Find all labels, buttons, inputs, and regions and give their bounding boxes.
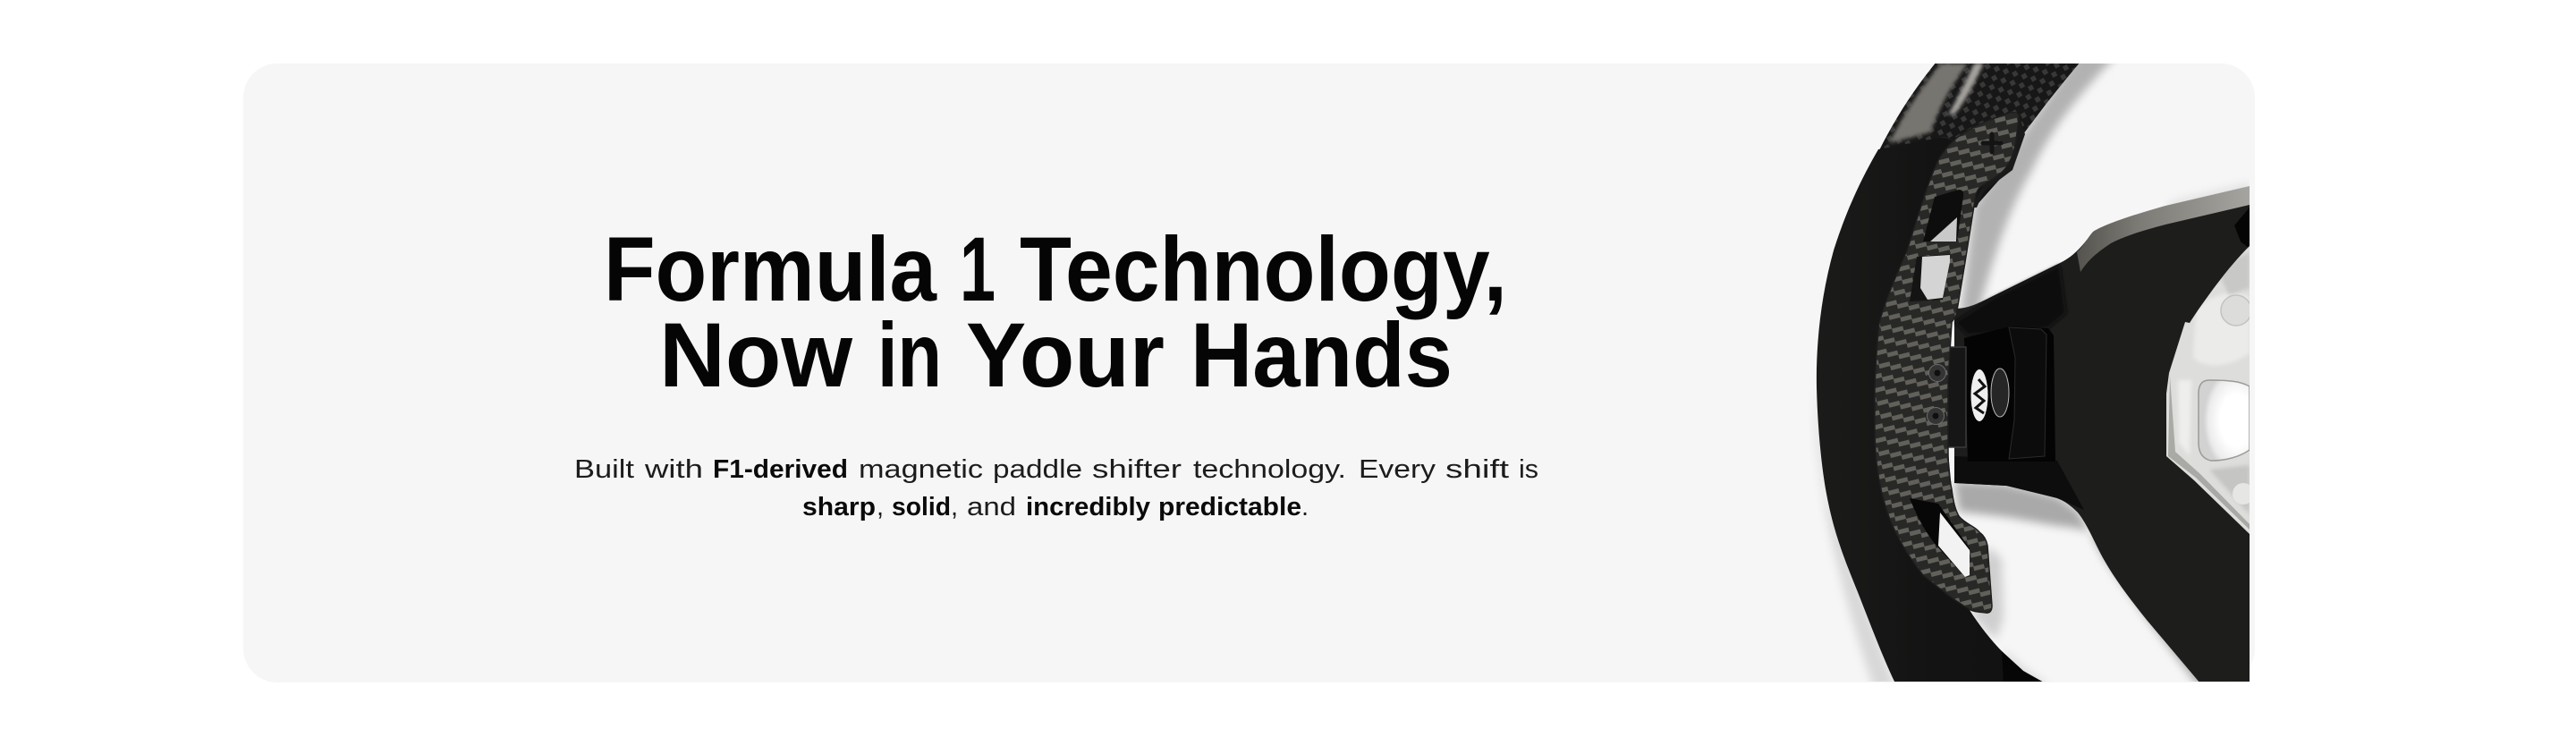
description text: solid [892, 493, 951, 521]
title: Formula [604, 218, 937, 320]
description text: paddle [993, 455, 1082, 484]
hub top trim [2077, 186, 2250, 272]
lower window [1910, 498, 1970, 577]
rim glossy joint [2002, 651, 2043, 682]
description text: sharp [802, 493, 876, 521]
description text: with [644, 455, 703, 484]
steering wheel illustration [1816, 54, 2254, 689]
carbon paddle [1875, 113, 2019, 613]
centre silver plate [2166, 246, 2254, 534]
upper window [1923, 190, 1963, 242]
magnet disc [1991, 369, 2009, 417]
hub top dark corner [2234, 208, 2250, 249]
spoke lower gloss [1954, 456, 2084, 510]
description text: F1-derived [713, 455, 848, 484]
hub body [1954, 188, 2250, 683]
description text: , [951, 493, 958, 521]
suede rim [1817, 137, 2044, 683]
description text: predictable [1158, 493, 1301, 521]
carbon rim section [1880, 64, 2079, 149]
title: Now [659, 304, 853, 406]
title: Hands [1191, 304, 1453, 406]
middle window [1910, 254, 1950, 301]
panel: feature card [243, 64, 2255, 682]
description text: Built [574, 455, 634, 484]
title: 1 [960, 218, 996, 320]
title: Your [966, 304, 1165, 406]
title: Technology, [1020, 218, 1507, 320]
description text: magnetic [859, 455, 983, 484]
description text: and [967, 493, 1016, 521]
description text: , [877, 493, 884, 521]
paddle backing edge [1975, 122, 2025, 208]
plus mark [1983, 134, 2001, 152]
description text: is [1519, 455, 1538, 484]
description text: . [1301, 493, 1309, 521]
title: in [877, 304, 942, 406]
bolts [1927, 365, 1946, 424]
spoke shading [1954, 265, 2066, 335]
paddle bracket [1946, 326, 2055, 462]
description text: shifter [1092, 455, 1182, 484]
plate opening [2199, 380, 2250, 461]
drop shadows [1816, 54, 2250, 689]
description text: incredibly [1026, 493, 1150, 521]
description text: shift [1445, 455, 1509, 484]
logo badge [1971, 369, 1987, 421]
description text: Every [1359, 455, 1436, 484]
description text: technology. [1193, 455, 1346, 484]
